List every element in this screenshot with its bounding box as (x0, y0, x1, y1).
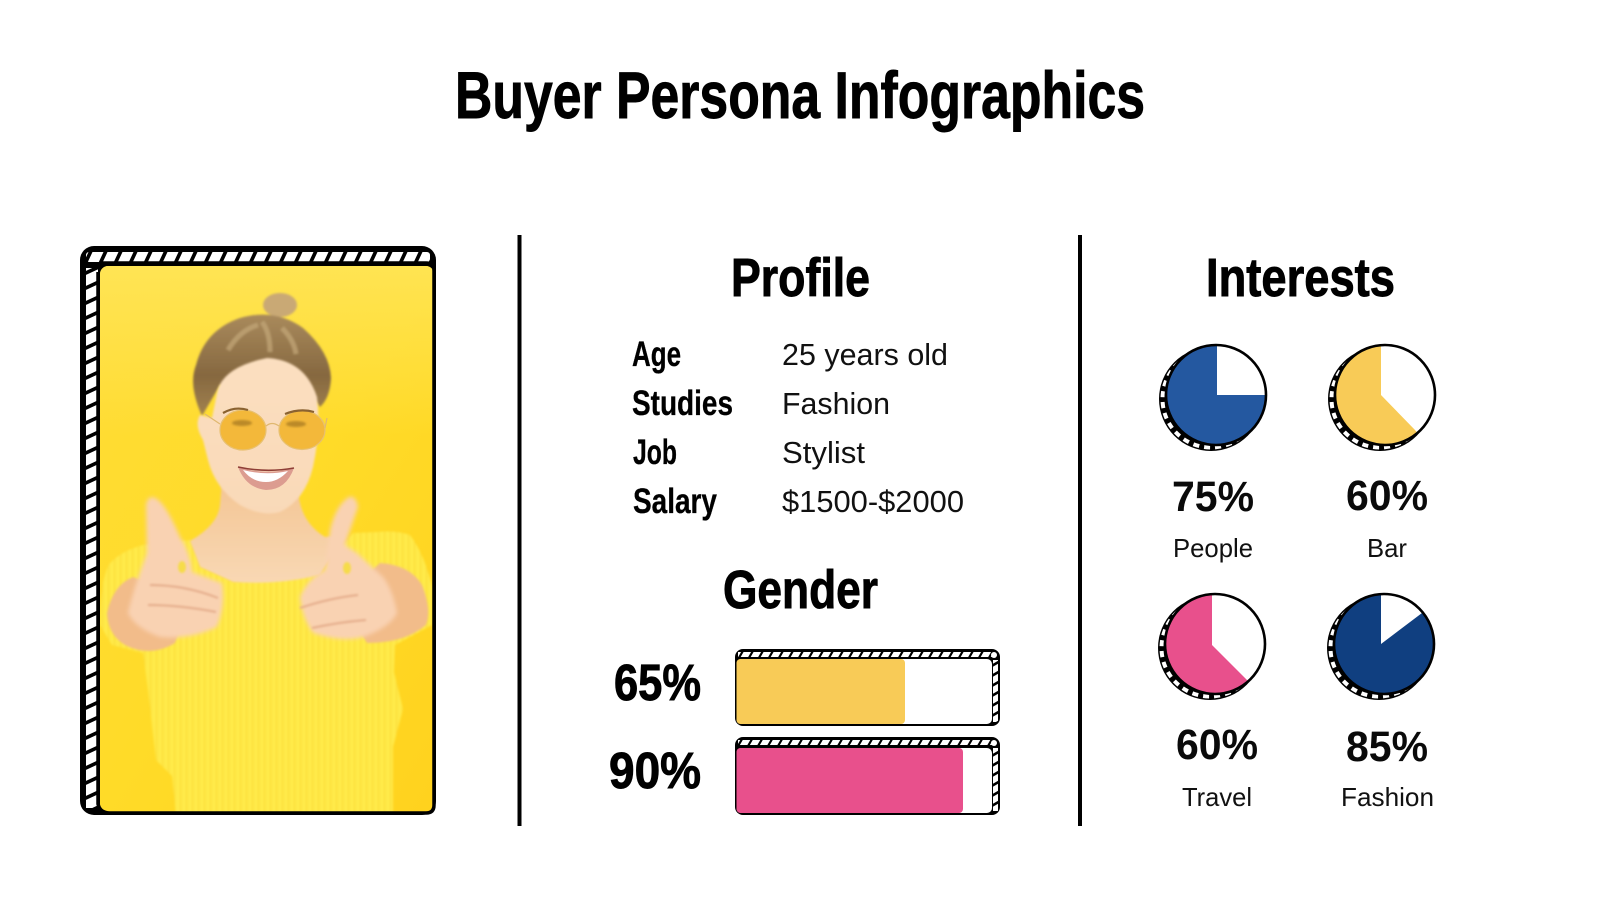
pie: people 75% (1159, 344, 1268, 451)
value: fashion: Fashion (1341, 782, 1434, 812)
value: fashion: 85% (1346, 723, 1428, 771)
row: age (632, 335, 948, 374)
pie: travel 60% (1158, 592, 1266, 700)
panel: persona photo (80, 246, 436, 815)
value: people: 75% (1172, 473, 1254, 521)
divider right (1078, 235, 1082, 826)
neck and chest (189, 486, 332, 584)
heading: profile: Profile (731, 248, 870, 308)
hair (193, 293, 331, 416)
value: travel: 60% (1176, 721, 1258, 769)
panel: gender (609, 560, 1000, 815)
panel: interests (1150, 248, 1450, 812)
pointing hands and arms (107, 497, 428, 651)
face (198, 358, 318, 513)
row: studies: Studies (632, 384, 733, 423)
heading: gender: Gender (723, 560, 878, 620)
title: Buyer Persona Infographics (455, 58, 1145, 132)
gender bar 65% (735, 649, 1000, 726)
row: job: Job (633, 433, 677, 472)
pie: bar 60% (1328, 344, 1436, 451)
row: age: 25 years old (782, 337, 948, 372)
value: bar: 60% (1346, 472, 1428, 520)
gender bar 90% (735, 737, 1000, 815)
gender value 90%: 90% (609, 742, 701, 799)
divider left (518, 235, 522, 826)
pie: fashion 85% (1327, 592, 1436, 700)
value: travel (1176, 721, 1258, 812)
shirt (100, 531, 433, 815)
value: fashion (1341, 723, 1434, 812)
value: bar: Bar (1367, 533, 1407, 563)
value: people (1172, 473, 1254, 563)
value: people: People (1173, 533, 1253, 563)
row: studies (632, 384, 890, 423)
value: travel: Travel (1182, 782, 1252, 812)
row: salary: $1500-$2000 (782, 484, 964, 519)
row: age: Age (632, 335, 681, 374)
heading: interests: Interests (1206, 248, 1395, 308)
row: job: Stylist (782, 435, 865, 470)
row: salary: Salary (633, 482, 717, 521)
photo: woman in yellow pointing forward (100, 266, 434, 815)
row: job (633, 433, 865, 472)
panel: profile (632, 248, 964, 521)
value: bar (1346, 472, 1428, 563)
row: studies: Fashion (782, 386, 890, 421)
row: salary (633, 482, 964, 521)
photo outline (98, 263, 434, 813)
photo frame with hatched edge (80, 246, 436, 815)
glasses (205, 409, 327, 450)
smile (238, 467, 294, 490)
gender value 65%: 65% (614, 654, 701, 711)
